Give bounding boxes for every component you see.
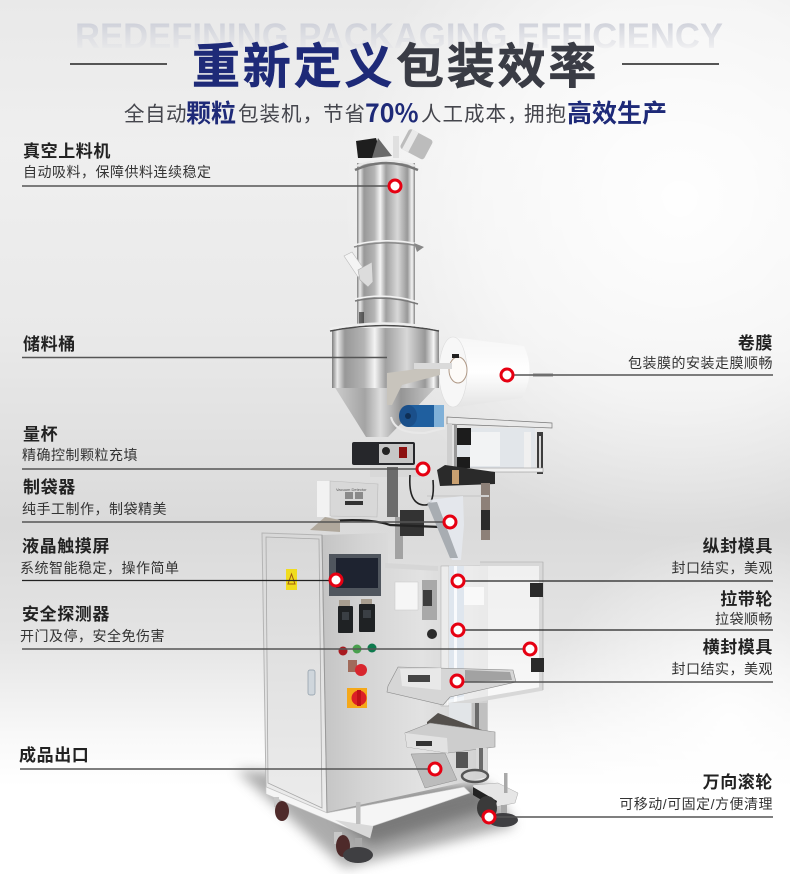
sight glass on feeder xyxy=(344,252,373,287)
cabinet door xyxy=(262,533,327,813)
temperature control box xyxy=(317,481,378,517)
film forming frame xyxy=(437,417,552,486)
callout: 真空上料机: 真空上料机 xyxy=(23,141,111,161)
callout: 万向滚轮 xyxy=(483,772,773,823)
vacuum feeder top: black box and motor xyxy=(356,128,434,160)
callout: 量杯: 精确控制颗粒充填 xyxy=(22,447,138,463)
callout: 拉带轮 xyxy=(452,589,773,636)
callout: 拉带轮: 拉带轮 xyxy=(720,589,773,609)
callout: 液晶触摸屏 xyxy=(20,537,342,586)
callout: 横封模具: 封口结实，美观 xyxy=(672,661,773,677)
warning label xyxy=(286,569,297,590)
callout: 万向滚轮: 可移动/可固定/方便清理 xyxy=(619,796,773,812)
indicator lights xyxy=(338,644,376,656)
subtitle: 高效生产 xyxy=(567,94,667,130)
door handle xyxy=(308,670,315,695)
callout: 液晶触摸屏: 系统智能稳定，操作简单 xyxy=(20,560,180,576)
touch screen xyxy=(329,554,381,596)
callout: 拉带轮: 拉袋顺畅 xyxy=(715,611,773,627)
bag former xyxy=(427,496,464,560)
callout: 横封模具: 横封模具 xyxy=(703,638,773,657)
cabinet front xyxy=(322,533,488,812)
callout: 纵封模具: 封口结实，美观 xyxy=(672,560,773,576)
callout: 安全探测器: 开门及停，安全免伤害 xyxy=(20,628,165,644)
callout: 制袋器: 制袋器 xyxy=(23,478,76,497)
subtitle: 全自动 xyxy=(124,97,187,127)
temperature controllers xyxy=(338,599,375,633)
subtitle: 拥抱 xyxy=(524,97,567,127)
callout: 真空上料机 xyxy=(22,141,401,192)
callout: 储料桶: 储料桶 xyxy=(23,335,76,354)
callout: 真空上料机: 自动吸料，保障供料连续稳定 xyxy=(23,164,212,180)
stop button xyxy=(348,660,367,676)
callout: 安全探测器 xyxy=(20,604,536,655)
film roll with arm xyxy=(387,337,553,407)
subtitle xyxy=(124,94,667,130)
title: 包装效率 xyxy=(396,41,599,94)
bag sealing column and boxes xyxy=(385,563,484,706)
callout: 横封模具 xyxy=(451,638,773,687)
callout: 液晶触摸屏: 液晶触摸屏 xyxy=(22,537,110,556)
callout: 制袋器: 纯手工制作，制袋精美 xyxy=(22,501,167,517)
callout: 卷膜: 卷膜 xyxy=(738,334,773,353)
subtitle: 人工成本， xyxy=(421,97,528,127)
watermark heading: REDEFINING PACKAGING EFFICIENCY: REDEFINING PACKAGING EFFICIENCY xyxy=(75,17,723,56)
subtitle: 节省 xyxy=(323,97,366,127)
vacuum feeder cylinder xyxy=(354,160,424,325)
callout: 卷膜 xyxy=(501,334,773,381)
discharge chute xyxy=(411,753,457,788)
callout: 制袋器 xyxy=(22,478,456,528)
blue motor xyxy=(391,405,445,433)
subtitle: 颗粒 xyxy=(186,94,236,130)
left foot with caster xyxy=(274,797,373,863)
title xyxy=(70,41,719,94)
callout: 成品出口 xyxy=(19,745,441,775)
packaging machine illustration xyxy=(236,128,553,868)
callout: 纵封模具: 纵封模具 xyxy=(703,537,773,556)
callout: 量杯: 量杯 xyxy=(23,424,58,444)
right foot with caster xyxy=(473,773,518,827)
dosing control box xyxy=(352,442,415,465)
temperature control box: Vacuum Detector xyxy=(336,487,367,492)
lower sealing assembly xyxy=(405,703,495,782)
callout: 万向滚轮: 万向滚轮 xyxy=(703,772,773,792)
callout: 安全探测器: 安全探测器 xyxy=(22,604,110,624)
transparent safety door xyxy=(447,562,544,705)
dosing plate and column xyxy=(310,465,490,559)
subtitle: 包装机， xyxy=(238,97,324,127)
callout: 量杯 xyxy=(22,424,429,475)
callout: 卷膜: 包装膜的安装走膜顺畅 xyxy=(628,355,773,371)
door hinges xyxy=(530,583,544,672)
base plate xyxy=(266,787,470,838)
floor shadow xyxy=(236,770,515,868)
horizontal sealing platform xyxy=(387,667,516,705)
callout: 成品出口: 成品出口 xyxy=(19,745,89,765)
callout: 纵封模具 xyxy=(452,537,773,587)
subtitle: 70% xyxy=(365,94,419,130)
storage hopper xyxy=(330,324,439,437)
main power switch xyxy=(347,688,367,708)
title: 重新定义 xyxy=(192,41,395,94)
cabinet xyxy=(262,533,488,838)
